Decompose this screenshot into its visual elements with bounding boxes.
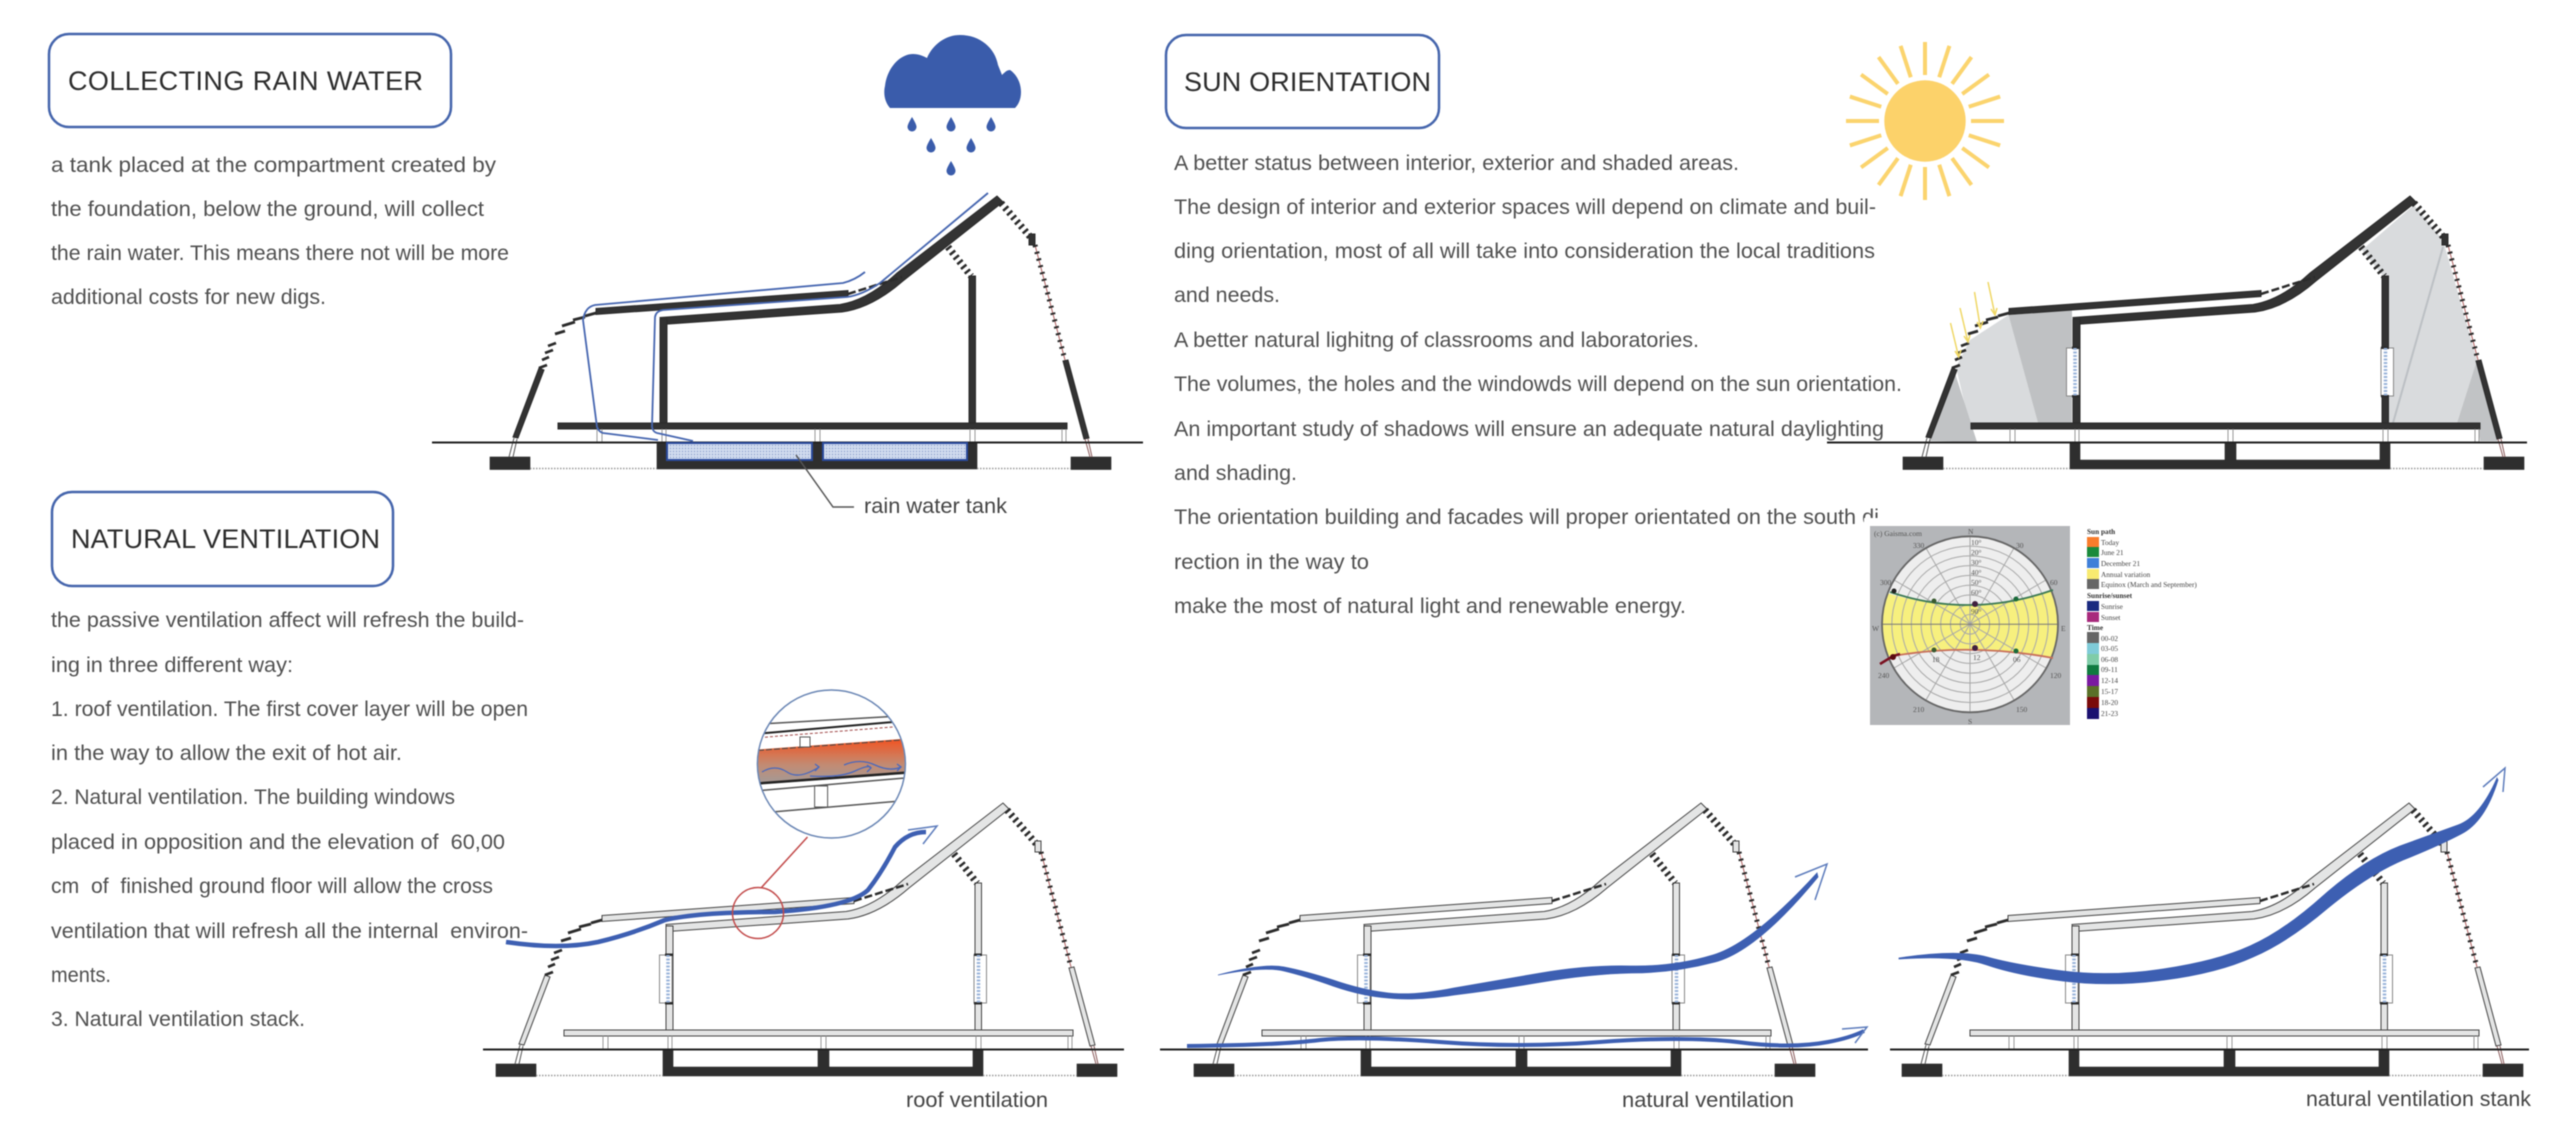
chart: sun path diagram: 12 — [1973, 653, 1981, 662]
chart: sun path diagram: 50° — [1971, 578, 1982, 587]
diagram: building section with rain water collection — [432, 193, 1143, 518]
arrow: under floor airflow — [1187, 1027, 1867, 1046]
legend: sun path: 12-14 — [2101, 676, 2118, 685]
panel: collecting rain water — [49, 34, 1143, 518]
label: roof ventilation: roof ventilation — [906, 1089, 1048, 1112]
text block: sun orientation description — [1174, 152, 1902, 618]
legend: sun path: 09-11 — [2101, 665, 2118, 674]
legend: sun path: 21-23 — [2101, 709, 2118, 718]
diagram: natural ventilation — [1160, 803, 1868, 1112]
arrow: cross ventilation airflow — [1218, 864, 1827, 999]
chart: sun path diagram: 20° — [1971, 548, 1982, 557]
legend: sun path: December 21 — [2101, 559, 2140, 568]
icon: rain cloud — [884, 35, 1021, 176]
chart: sun path diagram: (c) Gaisma.com — [1874, 529, 1922, 538]
text block: sun orientation description: and needs. — [1174, 284, 1280, 307]
text block: sun orientation description: The orientation building and facades will proper orientated on the south di — [1174, 506, 1879, 529]
legend: sun path: Sunrise — [2101, 602, 2123, 611]
chart: sun path diagram: N — [1968, 527, 1974, 536]
text block: sun orientation description: The volumes, the holes and the windowds will depend on the sun orientation. — [1174, 373, 1902, 396]
icon: sun — [1846, 42, 2004, 200]
legend: sun path: Sun path — [2087, 527, 2115, 536]
chart: sun path diagram: 300 — [1880, 578, 1892, 587]
text block: sun orientation description: A better natural lighitng of classrooms and laboratories. — [1174, 329, 1699, 352]
chart: sun path diagram: 330 — [1913, 541, 1924, 550]
chart: sun path diagram — [1860, 518, 2080, 730]
text block: sun orientation description: An important study of shadows will ensure an adequate natural daylighting — [1174, 418, 1884, 441]
chart: sun path diagram: 06 — [2013, 655, 2021, 664]
legend: sun path: 03-05 — [2101, 644, 2118, 653]
heading: natural ventilation — [52, 492, 393, 586]
text block: ventilation description — [51, 609, 528, 1031]
text block: rain water description: the foundation, below the ground, will collect — [51, 198, 484, 221]
rain water pipes — [583, 193, 988, 441]
text block: ventilation description: in the way to allow the exit of hot air. — [51, 742, 402, 765]
shaded volumes — [1929, 205, 2498, 442]
rain water tank fill — [667, 443, 967, 460]
text block: ventilation description: the passive ventilation affect will refresh the build- — [51, 609, 524, 632]
text block: sun orientation description: rection in the way to — [1174, 551, 1369, 574]
label: natural ventilation stank: natural ventilation stank — [2306, 1088, 2532, 1111]
chart: sun path diagram: 60° — [1971, 588, 1982, 597]
legend: sun path — [2087, 527, 2197, 719]
chart: sun path diagram: 210 — [1913, 705, 1924, 714]
text block: rain water description — [51, 154, 509, 309]
legend: sun path: Annual variation — [2101, 570, 2151, 579]
chart: sun path diagram: 90° — [1971, 607, 1982, 616]
heading: collecting rain water: COLLECTING RAIN WATER — [68, 66, 423, 96]
rain water tank leader — [796, 455, 854, 507]
text block: ventilation description: ing in three different way: — [51, 654, 293, 677]
diagram: building section with shading — [1827, 196, 2527, 470]
text block: rain water description: the rain water. This means there not will be more — [51, 242, 509, 265]
callout: magnified roof cavity — [750, 690, 915, 838]
chart: sun path diagram: 10° — [1971, 538, 1982, 547]
chart: sun path diagram: E — [2061, 624, 2066, 633]
chart: sun path diagram: 240 — [1878, 671, 1890, 680]
text block: ventilation description: ments. — [51, 964, 111, 987]
legend: sun path: 15-17 — [2101, 687, 2118, 696]
text block: sun orientation description: The design of interior and exterior spaces will depend on climate and buil- — [1174, 196, 1876, 219]
arrows: sun rays — [1950, 282, 1997, 357]
legend: sun path: June 21 — [2101, 548, 2124, 557]
legend: sun path: Equinox (March and September) — [2101, 580, 2197, 589]
chart: sun path diagram: W — [1872, 624, 1880, 633]
text block: ventilation description: 1. roof ventilation. The first cover layer will be open — [51, 698, 528, 721]
text block: sun orientation description: and shading. — [1174, 462, 1297, 485]
text block: ventilation description: ventilation that will refresh all the internal environ- — [51, 920, 528, 943]
legend: sun path: 18-20 — [2101, 698, 2118, 707]
text block: rain water description: a tank placed at the compartment created by — [51, 154, 497, 177]
heading: sun orientation: SUN ORIENTATION — [1184, 67, 1431, 97]
text block: sun orientation description: A better status between interior, exterior and shaded areas. — [1174, 152, 1739, 175]
heading: collecting rain water — [49, 34, 451, 127]
chart: sun path diagram: S — [1968, 717, 1972, 726]
text block: rain water description: additional costs for new digs. — [51, 286, 326, 309]
text block: sun orientation description: make the most of natural light and renewable energy. — [1174, 595, 1686, 618]
arrow: roof airflow — [506, 826, 937, 946]
text block: ventilation description: 3. Natural ventilation stack. — [51, 1008, 305, 1031]
legend: sun path: 06-08 — [2101, 655, 2118, 664]
chart: sun path diagram: 40° — [1971, 568, 1982, 577]
arrow: stack airflow — [1899, 768, 2505, 984]
text block: sun orientation description: ding orientation, most of all will take into consideration the local traditions — [1174, 240, 1875, 263]
label: rain water tank: rain water tank — [864, 495, 1008, 518]
heading: natural ventilation: NATURAL VENTILATION — [71, 524, 380, 554]
panel: sun orientation — [1166, 35, 2527, 730]
chart: sun path diagram: 120 — [2050, 671, 2062, 680]
legend: sun path: Sunrise/sunset — [2087, 591, 2133, 600]
legend: sun path: Today — [2101, 538, 2119, 547]
callout: roof detail marker — [732, 837, 808, 938]
text block: ventilation description: 2. Natural ventilation. The building windows — [51, 786, 455, 809]
legend: sun path: 00-02 — [2101, 634, 2118, 643]
legend: sun path: Time — [2087, 623, 2104, 632]
legend: sun path: Sunset — [2101, 613, 2120, 622]
diagram: roof ventilation — [483, 690, 1124, 1112]
label: natural ventilation: natural ventilation — [1622, 1089, 1794, 1112]
chart: sun path diagram: 18 — [1932, 655, 1940, 664]
chart: sun path diagram: 60 — [2050, 578, 2058, 587]
diagram: natural ventilation stack — [1890, 768, 2532, 1111]
chart: sun path diagram: 30° — [1971, 558, 1982, 567]
text block: ventilation description: cm of finished ground floor will allow the cross — [51, 875, 493, 898]
chart: sun path diagram: 30 — [2016, 541, 2024, 550]
chart: sun path diagram: 150 — [2016, 705, 2028, 714]
text block: ventilation description: placed in opposition and the elevation of 60,00 — [51, 831, 505, 854]
panel: natural ventilation text — [51, 492, 528, 1031]
heading: sun orientation — [1166, 35, 1439, 128]
